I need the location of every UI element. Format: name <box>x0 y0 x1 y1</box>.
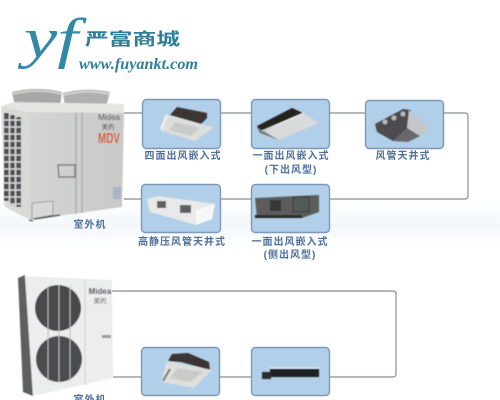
cassette icon lower <box>161 353 212 388</box>
unit box: high static pressure duct <box>142 184 220 232</box>
unit box: one-way cassette down-flow <box>252 100 330 148</box>
nameplate <box>113 187 121 199</box>
label: outdoor unit: 室外机 <box>74 218 106 231</box>
upper fan <box>35 285 81 331</box>
logo <box>17 8 198 73</box>
label: one-way cassette down-flow: (下出风型) <box>265 163 317 176</box>
unit box: slim duct lower <box>252 348 330 396</box>
feet <box>29 215 60 221</box>
one-way cassette icon <box>257 108 319 140</box>
cabinet front <box>25 276 113 396</box>
Midea logo: Midea <box>89 287 112 296</box>
cabinet side with vents <box>1 106 30 220</box>
label: ducted ceiling: 风管天井式 <box>376 149 430 162</box>
label: one-way cassette side-flow <box>252 235 328 261</box>
cabinet top <box>1 102 124 113</box>
lower fan <box>36 336 82 382</box>
slim duct icon <box>262 367 319 379</box>
unit box: four-way cassette lower <box>142 348 220 396</box>
label: one-way cassette side-flow: (侧出风型) <box>264 248 316 261</box>
outdoor unit: Midea twin fan: 美的 <box>94 296 107 305</box>
high static duct icon <box>147 196 215 225</box>
unit box: four-way cassette <box>142 100 220 148</box>
outdoor unit: Midea twin fan <box>18 275 113 396</box>
unit box: one-way cassette side-flow <box>252 184 330 232</box>
lower vent panel <box>32 201 53 219</box>
MDV badge: MDV <box>98 130 120 147</box>
ducted unit icon <box>375 109 430 142</box>
connecting lines: lower system <box>112 291 396 377</box>
door handle <box>58 165 75 177</box>
side-flow unit icon <box>255 195 319 218</box>
cassette icon <box>160 107 214 141</box>
label: one-way cassette down-flow: 一面出风嵌入式 <box>252 149 330 162</box>
cabinet side <box>18 275 33 396</box>
logo website url: www.fuyankt.com <box>79 56 198 73</box>
logo name: 严富商城 <box>85 25 180 50</box>
unit box: ducted ceiling <box>366 100 444 148</box>
label: four-way cassette: 四面出风嵌入式 <box>144 149 222 162</box>
label: one-way cassette down-flow <box>252 149 330 176</box>
label: one-way cassette side-flow: 一面出风嵌入式 <box>252 235 328 248</box>
outdoor unit: MDV <box>1 89 124 221</box>
outdoor unit: MDV: 美的 <box>102 122 115 131</box>
fans on top <box>12 89 62 106</box>
connecting lines: upper system <box>124 113 468 199</box>
label: high static pressure duct: 高静压风管天井式 <box>138 235 226 248</box>
Midea logo: Midea <box>98 113 120 122</box>
cabinet front <box>28 112 124 220</box>
logo monogram yf: yf <box>17 8 88 70</box>
